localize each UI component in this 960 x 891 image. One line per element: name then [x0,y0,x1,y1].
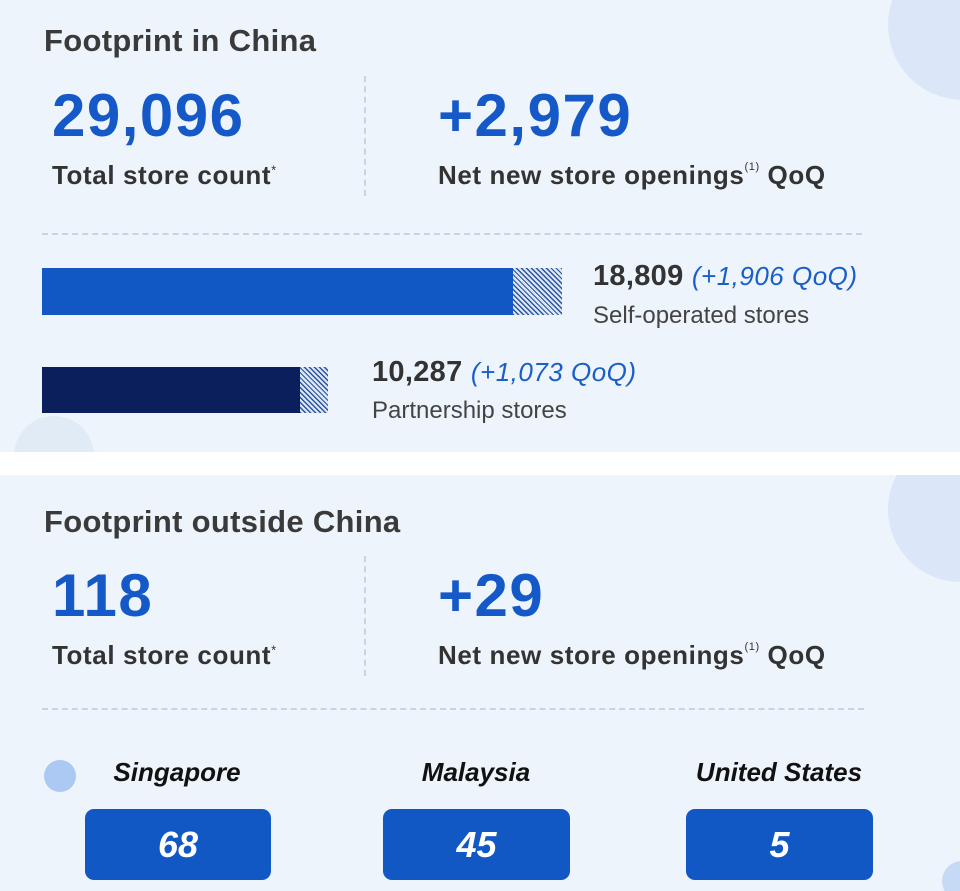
panel: footprint in China [0,0,960,452]
stat: net new openings: Net new store openings(1) QoQ [438,160,826,190]
stat: total store count: Total store count* [52,640,277,670]
panel: footprint outside China [0,475,960,891]
decorative circle top right [888,0,960,100]
stat: net new openings: +2,979 [438,82,632,149]
country: Malaysia: Malaysia [422,757,530,787]
bar: partnership [42,367,328,413]
country: United States [686,757,873,880]
country: United States: 5 [769,824,790,865]
decorative circle top right [888,437,960,582]
country: Malaysia [383,757,570,880]
country: Singapore: 68 [158,824,198,865]
title: Footprint in China [44,23,316,58]
decorative circle bottom left [14,416,94,496]
country: Singapore [85,757,271,880]
decorative dot [44,760,76,792]
label: self-operated [593,260,858,329]
label: partnership: 10,287 (+1,073 QoQ) [372,356,637,388]
label: self-operated: 18,809 (+1,906 QoQ) [593,260,858,292]
stat: total store count: 118 [52,562,153,629]
stat: net new openings: Net new store openings(1) QoQ [438,640,826,670]
stat: net new openings: +29 [438,562,544,629]
country: United States: United States [696,757,862,787]
label: partnership: Partnership stores [372,397,567,424]
stat: total store count: 29,096 [52,82,245,149]
stat: total store count: Total store count* [52,160,277,190]
label: self-operated: Self-operated stores [593,302,809,329]
bar: self-operated [42,268,562,315]
country: Singapore: Singapore [113,757,241,787]
title: Footprint outside China [44,504,400,539]
stat: total store count [52,82,277,190]
stat: net new openings [438,82,826,190]
decorative circle bottom right [942,861,960,891]
stat: total store count [52,562,277,670]
stat: net new openings [438,562,826,670]
label: partnership [372,356,637,424]
country: Malaysia: 45 [456,824,497,865]
